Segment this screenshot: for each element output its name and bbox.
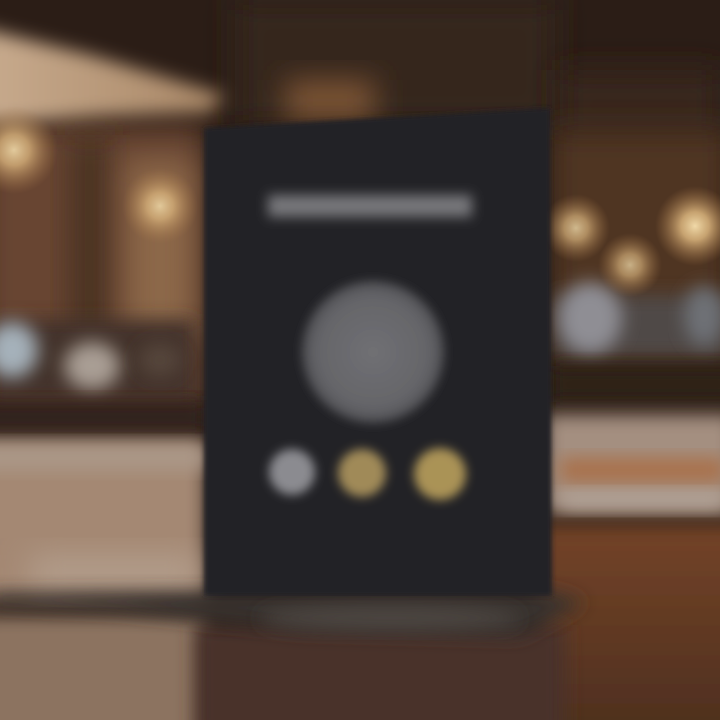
ceiling beam light <box>0 28 225 125</box>
left wall <box>0 125 205 405</box>
right lower counter <box>545 414 720 514</box>
gold disc right <box>414 448 466 500</box>
small grey disc <box>269 449 315 495</box>
large grey disc <box>302 281 444 423</box>
gold disc middle <box>338 449 386 497</box>
right wooden table <box>540 524 720 720</box>
right shelf edge <box>550 366 720 402</box>
left lower floor <box>0 440 205 600</box>
right wall <box>550 130 720 360</box>
lamp: right edge <box>655 186 720 266</box>
card foot highlight <box>260 606 520 630</box>
bottom left table <box>0 615 565 720</box>
lamp: right middle <box>598 233 662 297</box>
left shelf edge <box>0 402 205 432</box>
lamp: left edge <box>0 106 58 194</box>
menu card <box>204 108 552 596</box>
card stand base <box>0 592 585 636</box>
lamp: right near card <box>542 194 610 262</box>
card heading: illegible blurred title <box>268 195 472 217</box>
left shelf objects <box>0 322 182 390</box>
lamp: left centre <box>122 168 198 244</box>
